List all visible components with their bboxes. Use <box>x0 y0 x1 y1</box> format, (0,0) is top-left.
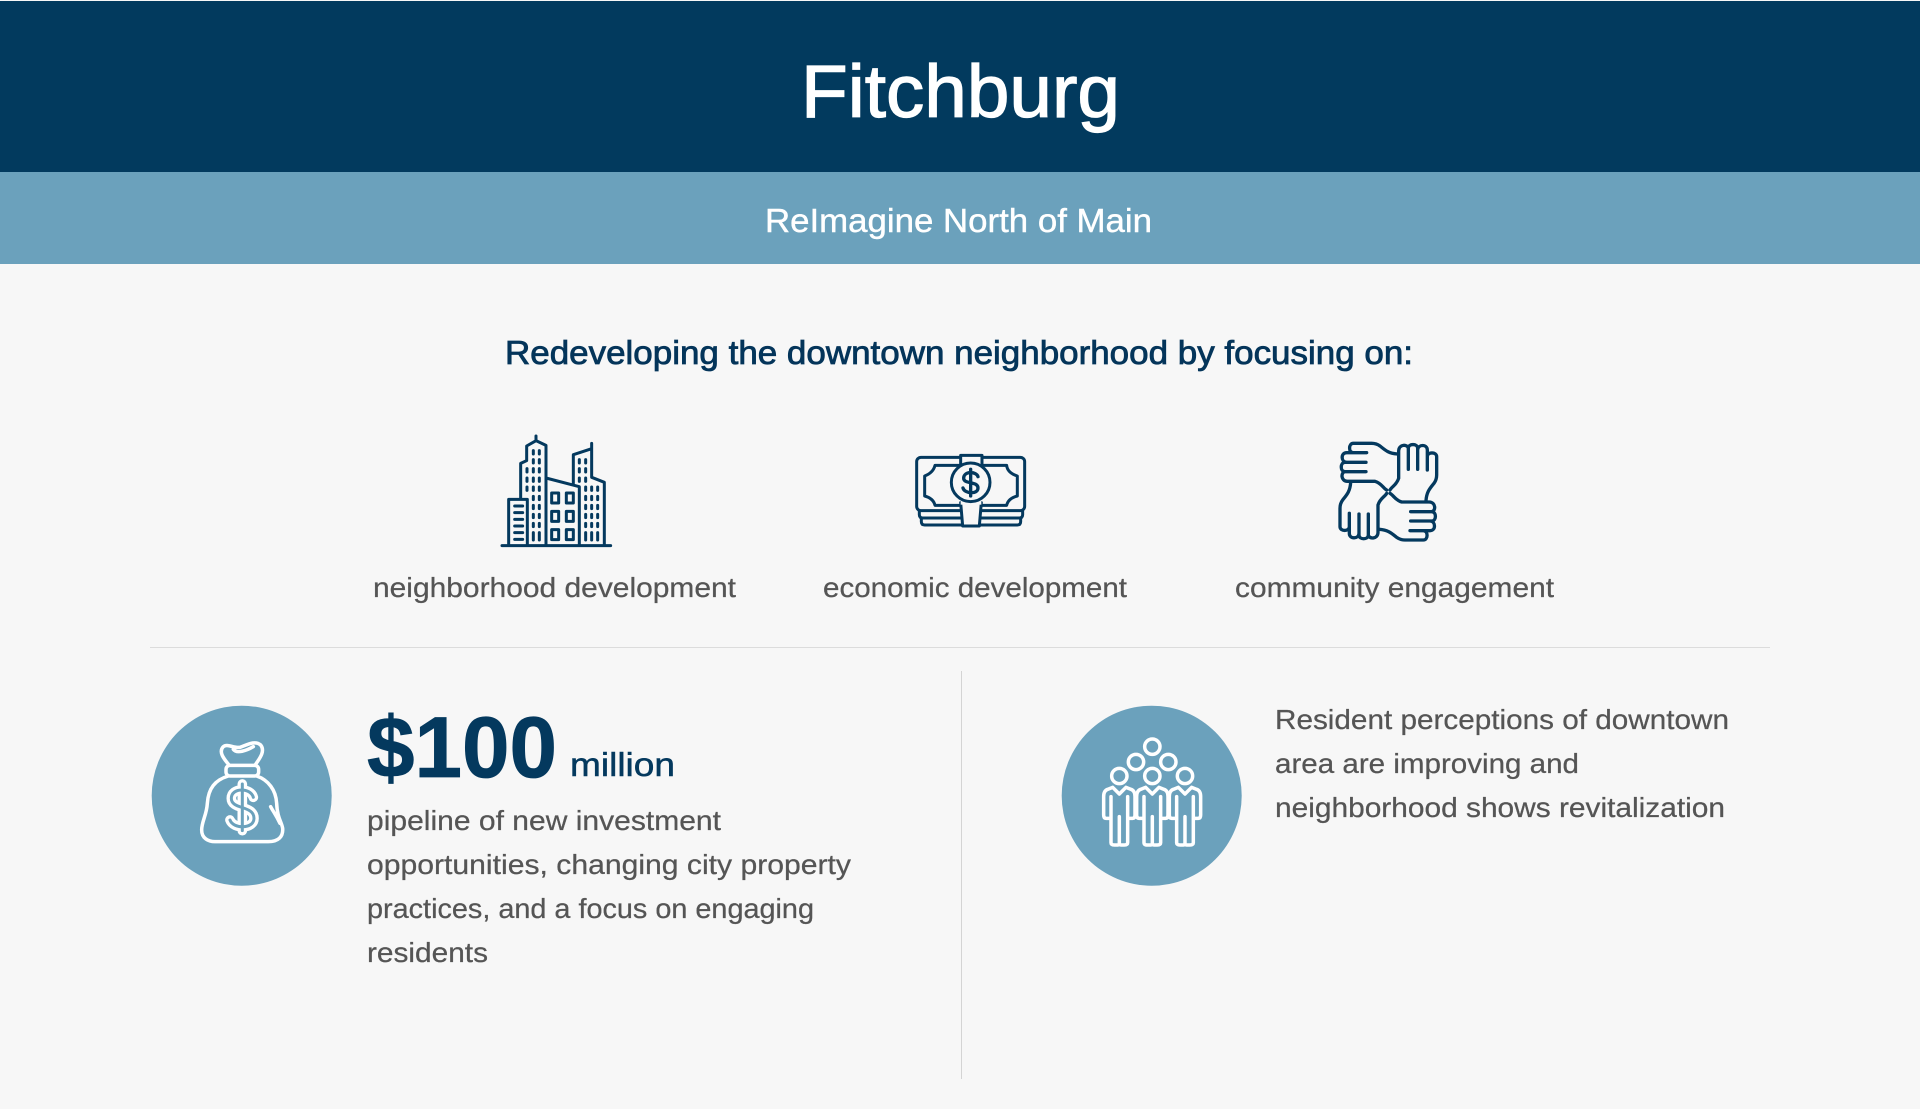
resident perceptions text: neighborhood shows revitalization <box>1275 792 1725 823</box>
focus item: community engagement <box>1235 443 1554 603</box>
resident perceptions text: area are improving and <box>1275 748 1579 779</box>
investment description: residents <box>367 937 488 968</box>
label: neighborhood development <box>373 572 736 603</box>
subtitle band <box>0 172 1920 264</box>
title: Fitchburg <box>801 50 1120 133</box>
subtitle: ReImagine North of Main <box>765 202 1152 239</box>
label: economic development <box>823 572 1127 603</box>
investment description <box>367 805 851 968</box>
investment description: practices, and a focus on engaging <box>367 893 814 924</box>
panel: investment <box>152 700 851 968</box>
investment description: opportunities, changing city property <box>367 849 851 880</box>
focus item: economic development <box>823 455 1127 603</box>
icon: money bag in circle <box>152 706 332 886</box>
label: community engagement <box>1235 572 1554 603</box>
investment description: pipeline of new investment <box>367 805 721 836</box>
resident perceptions text <box>1275 704 1729 823</box>
icon: stack of money <box>917 455 1025 526</box>
resident perceptions text: Resident perceptions of downtown <box>1275 704 1729 735</box>
icon: group of people in circle <box>1062 706 1242 886</box>
section heading: Redeveloping the downtown neighborhood by focusing on: <box>505 334 1413 371</box>
stat: $100 million: million <box>570 746 675 783</box>
icon: city buildings <box>502 436 611 546</box>
panel: resident perceptions <box>1062 704 1729 886</box>
icon: four linked hands <box>1340 443 1437 540</box>
focus item: neighborhood development <box>373 436 736 603</box>
header banner <box>0 1 1920 172</box>
stat: $100 million: $100 <box>367 700 557 796</box>
stat: $100 million <box>367 700 675 796</box>
